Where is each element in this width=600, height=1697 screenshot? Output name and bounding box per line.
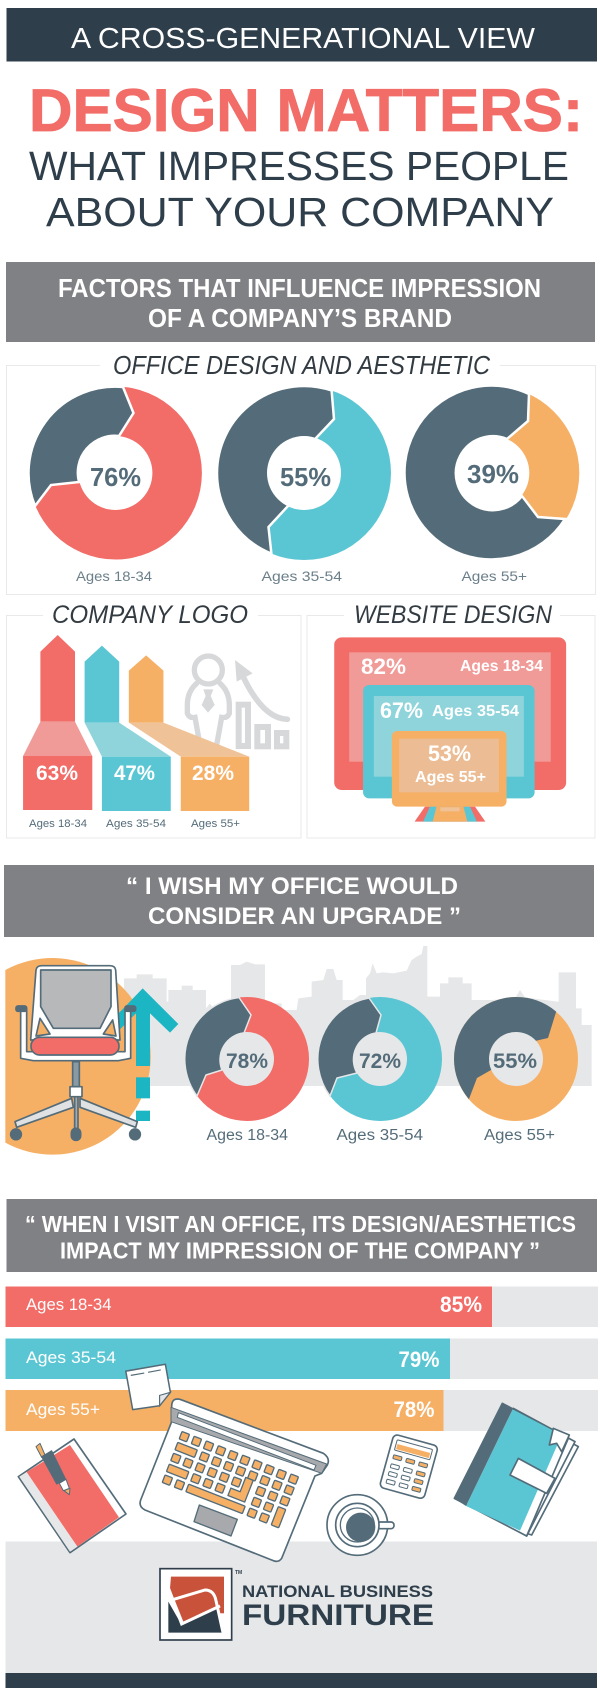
icon: coffee cup: [327, 1495, 394, 1555]
section heading: visit quote: [6, 1199, 597, 1272]
icon: businessman with growth arrow: [187, 656, 287, 746]
bar values and labels: [36, 762, 234, 785]
donut 55%: [454, 997, 578, 1144]
donut 72%: [318, 997, 442, 1144]
section heading: factors: [6, 262, 595, 342]
donut 39%: Ages 55+: [462, 568, 527, 584]
section heading: visit quote: “ WHEN I VISIT AN OFFICE, ITS DESIGN/AESTHETICS: [25, 1211, 576, 1237]
arrow bars: [23, 635, 249, 811]
footer background: [6, 1542, 597, 1673]
panel title: OFFICE DESIGN AND AESTHETIC: [113, 350, 490, 380]
age labels: Ages 55+: [191, 818, 240, 830]
header bar: [6, 8, 597, 62]
donut 72%: Ages 35-54: [336, 1127, 423, 1144]
section heading: office upgrade quote: “ I WISH MY OFFICE WOULD: [126, 873, 458, 900]
bar 28%: [129, 655, 249, 811]
monitor labels: Ages 18-34: [460, 658, 543, 675]
header bar: A CROSS-GENERATIONAL VIEW: [71, 23, 536, 55]
wordmark line two: FURNITURE: [242, 1599, 434, 1632]
monitor labels: 67%: [380, 698, 423, 723]
donut 55%: 55%: [280, 462, 331, 492]
age labels: Ages 18-34: [29, 818, 87, 830]
bar: ages 18-34: Ages 18-34: [26, 1296, 112, 1314]
monitor labels: Ages 35-54: [432, 703, 519, 720]
icon: laptop: [140, 1399, 328, 1561]
skyline background: [124, 946, 592, 1086]
donut 78%: [185, 997, 309, 1144]
bar values and labels: 28%: [192, 762, 234, 785]
title: [29, 77, 583, 235]
donut 39%: 39%: [467, 459, 519, 489]
section heading: office upgrade quote: CONSIDER AN UPGRADE ”: [148, 903, 461, 930]
pen: [36, 1443, 70, 1495]
trademark: TM: [235, 1570, 242, 1576]
icon: red notebook and pen: [18, 1439, 126, 1553]
donut 39%: [404, 385, 579, 584]
donut 55%: [217, 386, 391, 584]
panel: website design: [307, 601, 595, 838]
title: WHAT IMPRESSES PEOPLE: [29, 143, 569, 189]
panel: company logo: [6, 601, 301, 838]
bar: ages 55+: 78%: [394, 1397, 434, 1422]
bar: ages 35-54: [6, 1338, 598, 1379]
donut 55%: Ages 35-54: [262, 568, 342, 584]
title: ABOUT YOUR COMPANY: [46, 189, 554, 235]
bar values and labels: 47%: [114, 762, 155, 785]
keyboard keys: [162, 1431, 299, 1528]
donut 72%: 72%: [359, 1050, 401, 1073]
wordmark: NATIONAL BUSINESS: [242, 1582, 433, 1601]
bar: ages 35-54: Ages 35-54: [26, 1349, 116, 1367]
panel title: COMPANY LOGO: [52, 601, 248, 629]
icon: office chair with arrow: [5, 958, 178, 1155]
donut 76%: 76%: [90, 462, 141, 492]
bar: ages 18-34: [6, 1286, 598, 1327]
section heading: factors: OF A COMPANY’S BRAND: [148, 303, 452, 333]
logo mark: [160, 1569, 232, 1640]
footer bar: [6, 1673, 597, 1688]
donut 55%: Ages 55+: [484, 1127, 555, 1144]
monitor labels: [361, 654, 543, 786]
nested monitors: [334, 637, 566, 822]
panel: office design and aesthetic: [6, 350, 596, 594]
logo: National Business Furniture: [160, 1569, 434, 1640]
monitor labels: Ages 55+: [415, 769, 486, 786]
section heading: visit quote: IMPACT MY IMPRESSION OF THE COMPANY ”: [60, 1238, 540, 1264]
monitor labels: 53%: [428, 741, 471, 766]
donut 78%: Ages 18-34: [206, 1127, 288, 1144]
donut 76%: Ages 18-34: [76, 568, 152, 584]
chair: [11, 966, 140, 1140]
age labels: [29, 818, 240, 830]
donut 55%: 55%: [493, 1050, 537, 1073]
icon: teal planner: [454, 1403, 578, 1536]
bar 47%: [85, 646, 171, 811]
monitor labels: 82%: [361, 654, 406, 679]
donut 76%: [29, 386, 202, 584]
title: DESIGN MATTERS:: [29, 77, 583, 144]
upward teal arrow: [108, 988, 178, 1121]
section heading: factors: FACTORS THAT INFLUENCE IMPRESSION: [58, 273, 541, 303]
bar values and labels: 63%: [36, 762, 78, 785]
panel title: WEBSITE DESIGN: [354, 601, 553, 629]
donut 78%: 78%: [226, 1050, 268, 1073]
orange circle: [5, 958, 151, 1155]
icon: sticky note: [126, 1364, 170, 1410]
age labels: Ages 35-54: [106, 818, 166, 830]
icon: calculator: [379, 1434, 438, 1499]
bar: ages 55+: Ages 55+: [26, 1401, 100, 1419]
bar: ages 18-34: 85%: [440, 1292, 482, 1317]
bar: ages 35-54: 79%: [398, 1347, 440, 1372]
bar 63%: [23, 635, 92, 810]
section heading: office upgrade quote: [4, 865, 594, 937]
bar: ages 55+: [6, 1390, 598, 1431]
